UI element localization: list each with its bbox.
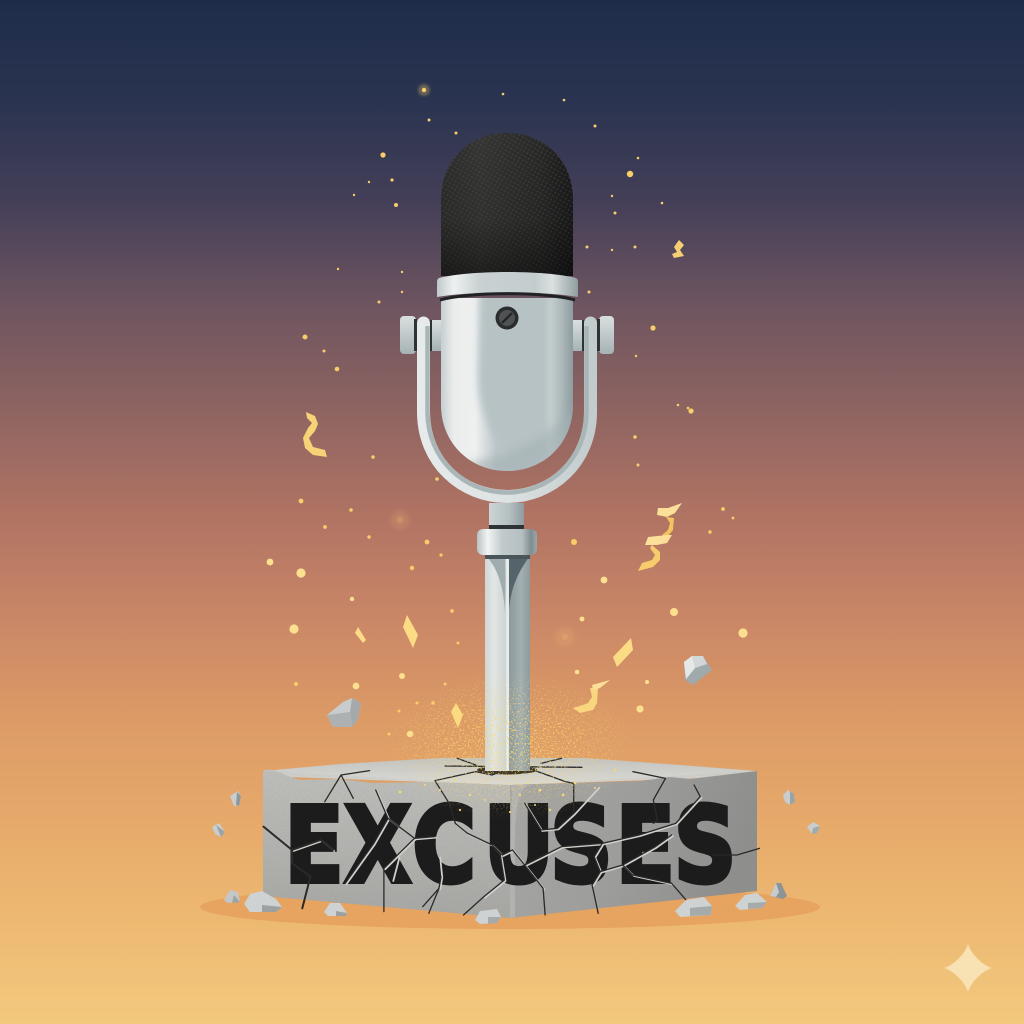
- rock: [224, 890, 240, 903]
- ribbon: top right small: [672, 240, 684, 258]
- crack lines: [263, 758, 759, 915]
- collar band: [437, 272, 578, 300]
- floating rock right: [684, 656, 712, 685]
- faint glow spots: [391, 511, 575, 647]
- concrete block: [263, 758, 759, 918]
- floating rock left: [327, 698, 361, 727]
- crater hole: [477, 766, 537, 774]
- rock: [735, 893, 767, 910]
- rounded front corner highlight: [510, 785, 530, 918]
- left face: [263, 770, 510, 918]
- pale gold sparks: [267, 559, 748, 737]
- ground shadow ellipse: [200, 885, 820, 929]
- right face: [510, 771, 757, 918]
- grille: [441, 133, 573, 276]
- ribbon: left: [303, 412, 327, 457]
- sparkle mark: [944, 944, 992, 992]
- confetti ribbons: [303, 240, 684, 713]
- ribbon: right large: [638, 503, 682, 571]
- cracks: [263, 758, 759, 915]
- side chip: [212, 823, 225, 837]
- side chip: [783, 790, 795, 805]
- yoke arm: [424, 323, 590, 496]
- top face: [263, 758, 757, 785]
- rock: [324, 903, 347, 916]
- side chip: [230, 791, 241, 806]
- stone grain: [263, 771, 748, 916]
- neck ring: [477, 525, 537, 555]
- yoke connectors: [429, 320, 585, 351]
- rock: [770, 883, 787, 899]
- word: EXCUSES: EXCUSES: [285, 785, 736, 907]
- floating gold sparks: [294, 84, 734, 736]
- side chip: [807, 822, 820, 834]
- dust on top of block: [398, 769, 616, 813]
- body: [441, 298, 573, 471]
- screw: [496, 306, 518, 330]
- ribbon: small lower right: [573, 680, 610, 713]
- crack highlights: [293, 788, 701, 898]
- rock: [244, 891, 282, 912]
- yoke knobs: [400, 316, 614, 354]
- rock: [675, 897, 712, 917]
- microphone: [400, 133, 614, 771]
- confetti chips: [355, 615, 633, 728]
- pole: [485, 555, 530, 771]
- ground rocks: [212, 790, 820, 924]
- rock: [475, 909, 501, 924]
- gold dust burst: [394, 674, 626, 818]
- neck: [489, 503, 524, 528]
